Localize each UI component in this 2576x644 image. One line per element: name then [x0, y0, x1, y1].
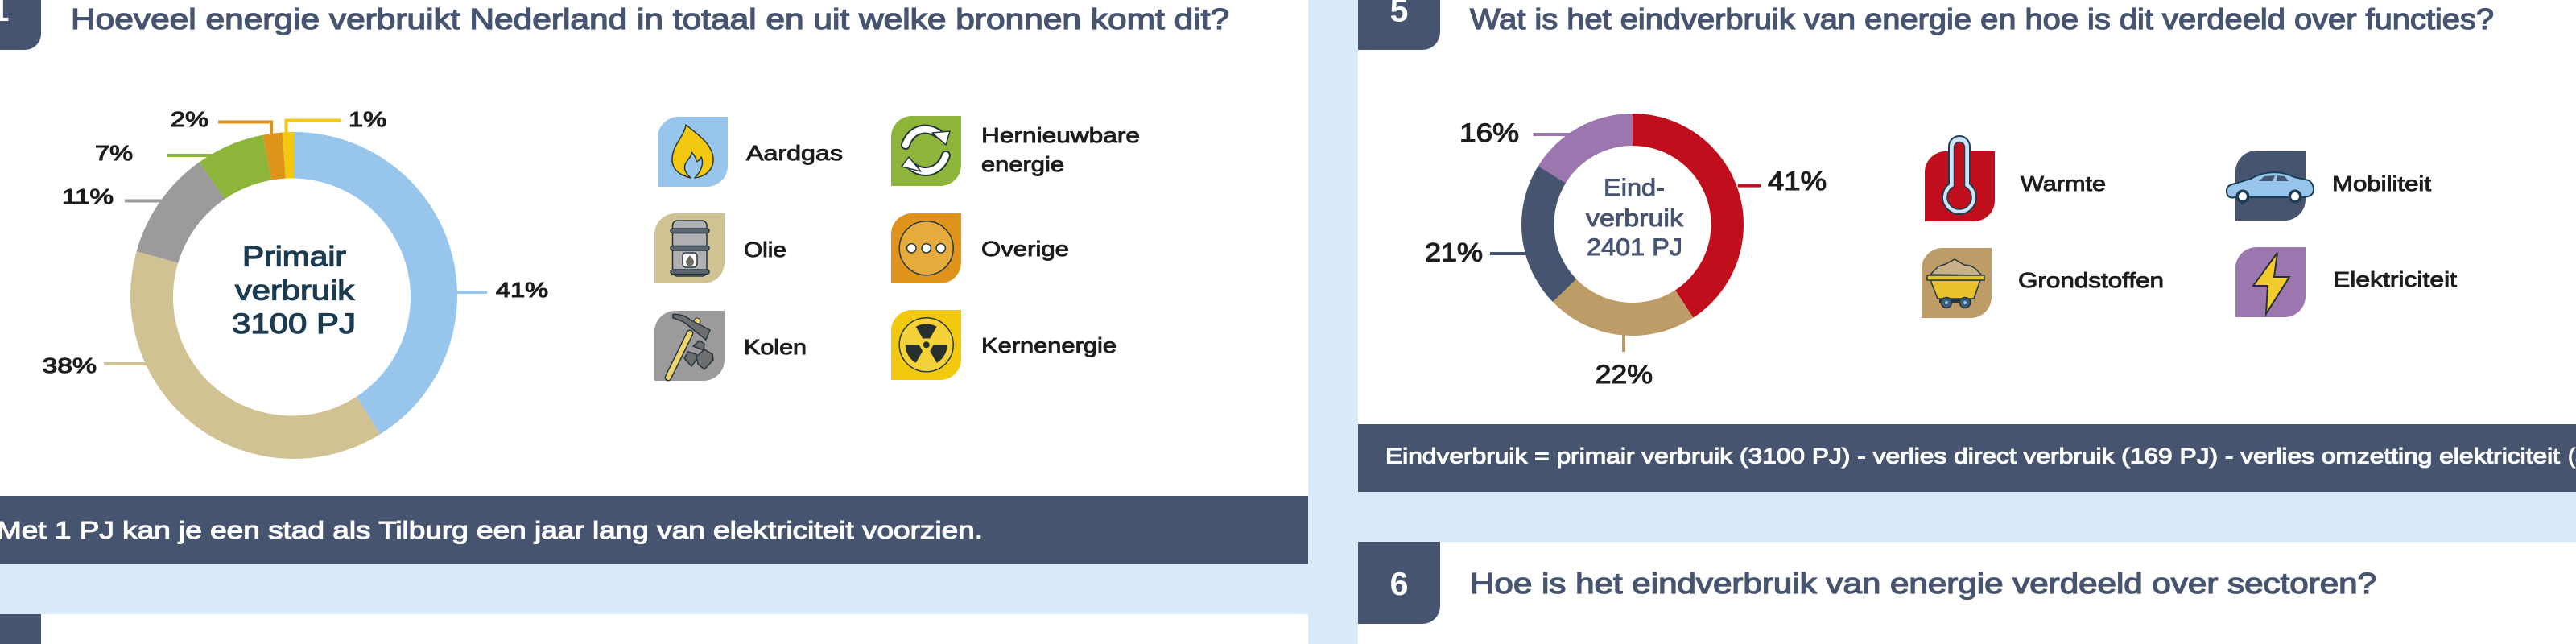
- legend: Warmte: Warmte: [2021, 171, 2106, 196]
- legend: Kolen: [654, 311, 807, 381]
- icon: mine cart: [1922, 248, 1992, 318]
- info bar: final consumption formula: [1358, 424, 2576, 492]
- donut chart: primary consumption: 2%: [171, 107, 208, 131]
- legend: Kolen: Kolen: [744, 335, 807, 359]
- legend: Grondstoffen: Grondstoffen: [2018, 268, 2164, 292]
- badge 6: [1358, 542, 1440, 624]
- donut chart: primary consumption: 7%: [95, 141, 133, 165]
- panel 6: sectors: [1358, 542, 2576, 644]
- donut chart: final consumption: [1425, 114, 1827, 389]
- info bar: 1 PJ explanation: Met 1 PJ kan je een stad als Tilburg een jaar lang van elektriciteit voorzien.: [0, 516, 983, 544]
- legend: Aardgas: Aardgas: [746, 141, 843, 165]
- heading 5: Wat is het eindverbruik van energie en hoe is dit verdeeld over functies?: [1470, 2, 2494, 35]
- icon: hammer and coal: [654, 311, 724, 381]
- icon: oil barrel: [654, 213, 724, 283]
- icon: flame: [658, 117, 728, 187]
- legend: Warmte: [1925, 136, 2106, 221]
- legend: Elektriciteit: [2235, 247, 2458, 317]
- badge 5: [1358, 0, 1440, 50]
- badge 6: 6: [1390, 565, 1408, 602]
- donut chart: primary consumption: 41%: [496, 278, 548, 302]
- donut chart: final consumption: verbruik: [1586, 205, 1684, 232]
- legend: Grondstoffen: [1922, 248, 2164, 318]
- icon: car: [2227, 151, 2314, 221]
- donut chart: final consumption: 41%: [1768, 167, 1827, 196]
- donut chart: primary consumption: 1%: [349, 107, 386, 131]
- donut chart: final consumption: 16%: [1459, 118, 1519, 147]
- legend: Olie: [654, 213, 786, 283]
- donut chart: primary consumption: [42, 107, 548, 459]
- heading 6: Hoe is het eindverbruik van energie verdeeld over sectoren?: [1470, 567, 2376, 600]
- donut chart: primary consumption: 38%: [42, 353, 97, 378]
- icon: recycle arrows: [891, 116, 961, 186]
- donut chart: primary consumption: Primair: [242, 242, 346, 272]
- legend: Mobiliteit: Mobiliteit: [2332, 171, 2432, 196]
- donut chart: final consumption: 22%: [1596, 360, 1653, 389]
- legend: Hernieuwbare energie: energie: [981, 152, 1064, 176]
- badge 1: [0, 0, 41, 50]
- icon: thermometer: [1925, 136, 1995, 221]
- info bar: 1 PJ explanation: [0, 496, 1308, 564]
- icon: three dots: [891, 213, 961, 283]
- legend: Overige: [891, 213, 1069, 283]
- legend: Kernenergie: [891, 310, 1117, 380]
- donut chart: primary consumption: verbruik: [235, 275, 355, 306]
- panel 2: top edge: [0, 614, 1308, 644]
- icon: lightning bolt: [2235, 247, 2306, 317]
- legend: Mobiliteit: [2227, 151, 2432, 221]
- legend: Elektriciteit: Elektriciteit: [2333, 267, 2458, 291]
- donut chart: primary consumption: 11%: [62, 184, 114, 208]
- badge 2: [0, 614, 41, 644]
- heading 1: Hoeveel energie verbruikt Nederland in totaal en uit welke bronnen komt dit?: [71, 2, 1229, 35]
- info bar: final consumption formula: Eindverbruik = primair verbruik (3100 PJ) - verlies direct verbruik (169 PJ) - verlies omzetting elektriciteit: [1385, 444, 2561, 469]
- legend: Aardgas: [658, 117, 843, 187]
- legend: Olie: Olie: [744, 237, 786, 262]
- donut chart: final consumption: 2401 PJ: [1587, 234, 1682, 261]
- donut chart: final consumption: Eind-: [1604, 175, 1665, 201]
- panel 1: primary energy consumption: [0, 0, 1308, 496]
- donut chart: primary consumption: 3100 PJ: [232, 308, 356, 340]
- icon: radiation symbol: [891, 310, 961, 380]
- panel 5: final consumption: [1358, 0, 2576, 424]
- legend: Overige: Overige: [981, 237, 1069, 261]
- legend: Hernieuwbare energie: [891, 116, 1140, 186]
- legend: Kernenergie: Kernenergie: [981, 333, 1117, 357]
- donut chart: final consumption: 21%: [1425, 238, 1483, 267]
- legend: Hernieuwbare energie: Hernieuwbare: [981, 123, 1140, 147]
